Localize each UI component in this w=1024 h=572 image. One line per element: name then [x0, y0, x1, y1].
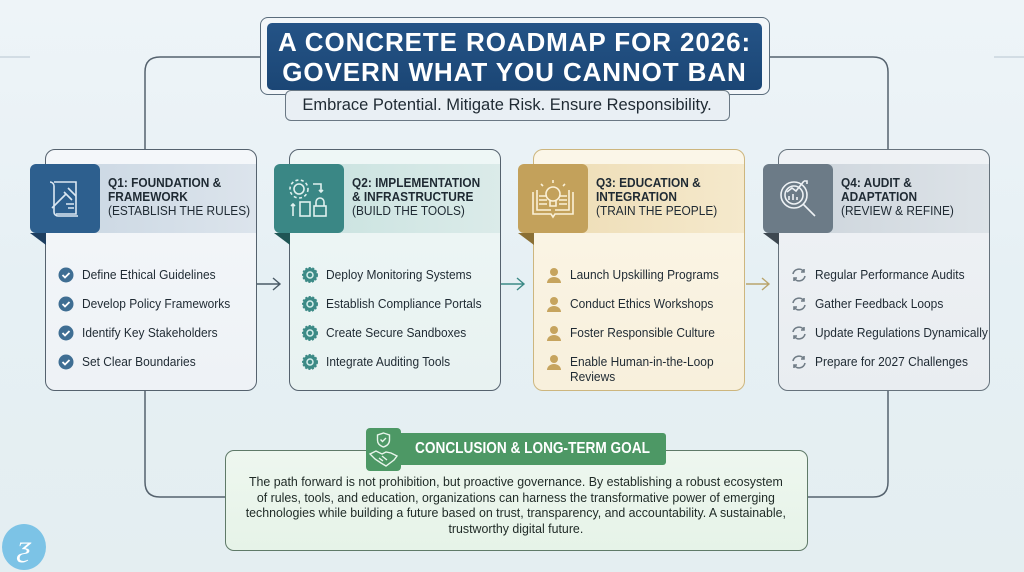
heading: Q1: (ESTABLISH THE RULES) [108, 204, 250, 218]
heading: Q3: Q3: EDUCATION & [596, 176, 701, 190]
panel: conclusion [225, 450, 808, 551]
heading: Q4: (REVIEW & REFINE) [841, 204, 954, 218]
arrow: Q2 to Q3 [501, 278, 525, 290]
subtitle: Embrace Potential. Mitigate Risk. Ensure Responsibility. [303, 95, 712, 114]
heading: Q4 [841, 176, 954, 218]
text: conclusion body [246, 475, 786, 536]
list: Q4 items: Gather Feedback Loops [815, 296, 943, 311]
list: Q1 items: Identify Key Stakeholders [82, 325, 218, 340]
heading: Q3 [596, 176, 717, 218]
text: conclusion body: trustworthy digital future. [449, 522, 583, 536]
icon: magnifier chart [763, 164, 833, 233]
list: Q3 items: Enable Human-in-the-Loop [570, 354, 714, 369]
icon: gear and lock [274, 164, 344, 233]
list: Q2 items: Create Secure Sandboxes [326, 325, 466, 340]
heading: Q1: FRAMEWORK [108, 190, 188, 204]
heading: Q2: Q2: IMPLEMENTATION [352, 176, 480, 190]
list: Q3 items: Launch Upskilling Programs [570, 267, 719, 282]
heading: Q4: ADAPTATION [841, 190, 917, 204]
heading: Q3: (TRAIN THE PEOPLE) [596, 204, 717, 218]
list: Q2 items: Establish Compliance Portals [326, 296, 482, 311]
list: Q3 items: Foster Responsible Culture [570, 325, 715, 340]
list: Q3 items [547, 267, 719, 384]
list: Q1 items: Develop Policy Frameworks [82, 296, 230, 311]
arrow: Q3 to Q4 [746, 278, 770, 290]
text: conclusion body: of rules, tools, and education, organizations can harness the transformative power of emerging [257, 490, 775, 504]
heading: Q2 [352, 176, 480, 218]
heading: Q2: & INFRASTRUCTURE [352, 190, 473, 204]
title: GOVERN WHAT YOU CANNOT BAN [282, 57, 747, 87]
panel: Q2 [289, 149, 501, 391]
panel: Q4 [778, 149, 990, 391]
text: conclusion body: technologies while building a future based on trust, transparency, and accountability. A sustainable, [246, 506, 786, 520]
heading: Q3: INTEGRATION [596, 190, 677, 204]
arrow: Q1 to Q2 [257, 278, 281, 290]
panel: Q1 [45, 149, 257, 391]
list: Q1 items: Define Ethical Guidelines [82, 267, 216, 282]
list: Q4 items: Update Regulations Dynamically [815, 325, 988, 340]
list: Q4 items: Regular Performance Audits [815, 267, 965, 282]
icon: gavel scroll [30, 164, 100, 233]
text: conclusion body: The path forward is not prohibition, but proactive governance. By establishing a robust ecosystem [249, 475, 783, 489]
heading: Q4: Q4: AUDIT & [841, 176, 912, 190]
icon: logo: ƺ [17, 530, 31, 563]
list: Q2 items: Integrate Auditing Tools [326, 354, 450, 369]
title block [260, 17, 770, 95]
list: Q4 items: Prepare for 2027 Challenges [815, 354, 968, 369]
heading: conclusion label: CONCLUSION & LONG-TERM GOAL [415, 440, 649, 457]
list: Q2 items: Deploy Monitoring Systems [326, 267, 472, 282]
icon: handshake shield [366, 428, 401, 471]
heading: conclusion label [366, 428, 666, 471]
subtitle [285, 90, 730, 121]
title [267, 23, 762, 90]
list: Q1 items: Set Clear Boundaries [82, 354, 196, 369]
list: Q3 items: Reviews [570, 369, 615, 384]
heading: Q1 [108, 176, 250, 218]
heading: Q2: (BUILD THE TOOLS) [352, 204, 465, 218]
list: Q4 items [792, 267, 988, 369]
heading: Q1: Q1: FOUNDATION & [108, 176, 221, 190]
list: Q3 items: Conduct Ethics Workshops [570, 296, 713, 311]
icon: logo [2, 524, 46, 570]
icon: book and bulb [518, 164, 588, 233]
list: Q2 items [302, 267, 482, 370]
title: A CONCRETE ROADMAP FOR 2026: [278, 27, 751, 57]
list: Q1 items [58, 267, 230, 370]
panel: Q3 [533, 149, 745, 391]
